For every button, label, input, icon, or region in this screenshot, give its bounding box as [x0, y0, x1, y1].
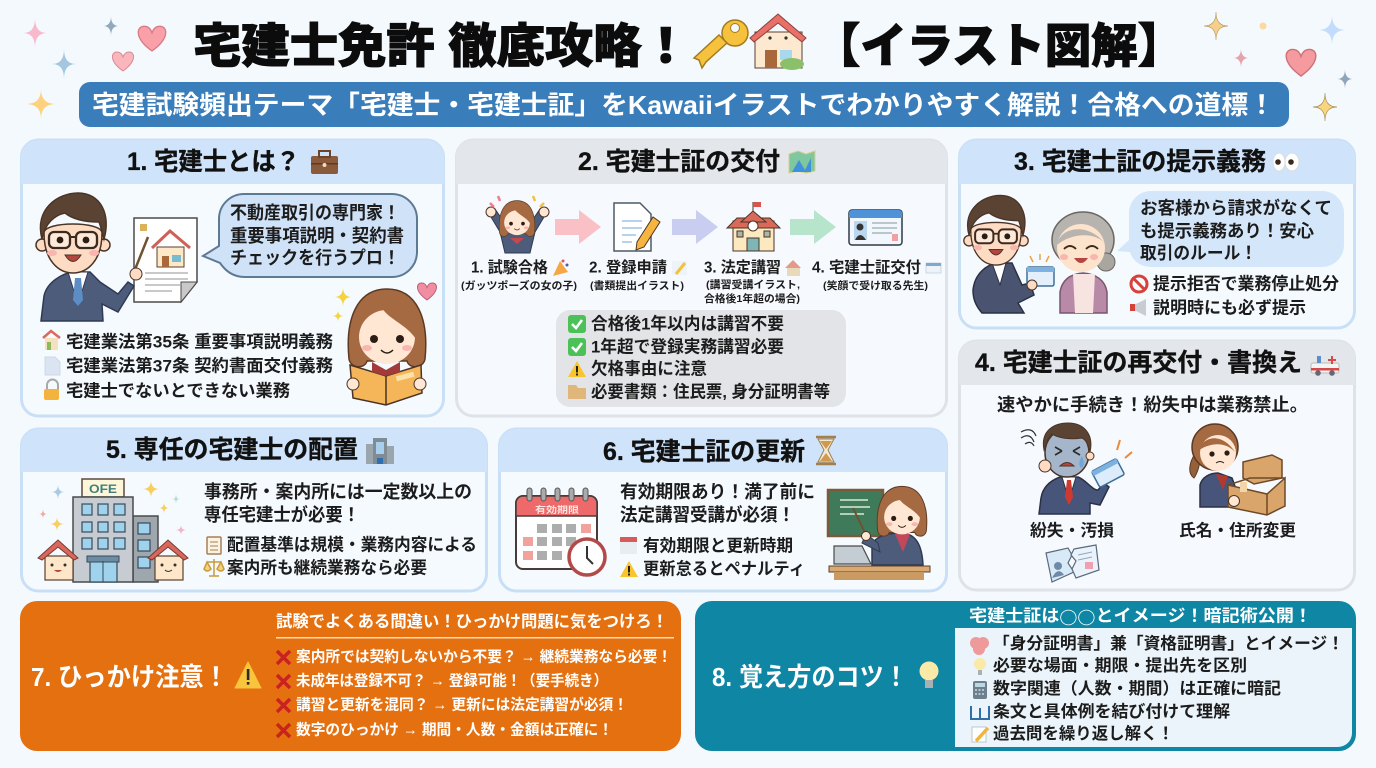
step labels: 1. 試験合格 — [471, 258, 548, 276]
panel: 8 覚え方のコツ — [695, 601, 1356, 751]
panel: 1 宅建士とは — [21, 140, 444, 416]
icon: small calendar — [620, 537, 637, 554]
panel: 5 専任の宅建士の配置 — [21, 429, 487, 591]
panel: 3 提示義務: 説明時にも必ず提示 — [1153, 298, 1306, 318]
body text: 事務所・案内所には一定数以上の — [204, 482, 472, 502]
icon: brain — [970, 637, 989, 655]
step: school — [727, 202, 780, 251]
icon: warning — [235, 662, 261, 688]
arrow: purple — [672, 210, 718, 244]
step: application form — [614, 203, 660, 251]
subtitle banner: 宅建試験頻出テーマ「宅建士・宅建士証」をKawaiiイラストでわかりやすく解説！合格への道標！ — [92, 90, 1275, 120]
step labels: 4. 宅建士証交付 — [812, 258, 921, 276]
speech bubble — [203, 194, 417, 277]
body text: 法定講習受講が必須！ — [620, 504, 795, 525]
heading: 8. 覚え方のコツ！ — [712, 662, 908, 692]
icon: small card — [926, 263, 941, 273]
list: 宅建士でないとできない業務 — [66, 382, 290, 400]
step labels: (ガッツポーズの女の子) — [461, 279, 577, 292]
icon: scales — [204, 559, 224, 576]
speech bubble: 不動産取引の専門家！ — [230, 203, 400, 223]
title: 宅建士免許 徹底攻略！ — [193, 20, 690, 72]
icon: office building — [366, 438, 394, 464]
speech bubble — [1117, 191, 1344, 267]
illustration: calendar with clock: 有効期限 — [535, 504, 579, 515]
trap list: 案内所では契約しないから不要？ → 継続業務なら必要！ — [296, 648, 672, 666]
icon: party popper — [553, 260, 568, 276]
illustration: office and houses — [38, 479, 188, 582]
icon: clipboard — [207, 537, 221, 554]
list: 宅建業法第37条 契約書面交付義務 — [66, 356, 333, 376]
step: license card — [849, 210, 902, 245]
icon: memo pencil — [972, 727, 988, 742]
trap list: 未成年は登録不可？ → 登録可能！（要手続き） — [296, 672, 608, 690]
panel: 6 宅建士証の更新 — [499, 429, 947, 591]
icon: light bulb — [920, 662, 938, 688]
body text: 配置基準は規模・業務内容による — [227, 534, 477, 554]
man presenting card — [964, 195, 1054, 313]
icon: memo — [672, 261, 687, 275]
tips list: 必要な場面・期限・提出先を区別 — [993, 656, 1247, 675]
heading: 2. 宅建士証の交付 — [578, 148, 780, 176]
body text: 専任宅建士が必要！ — [204, 504, 360, 525]
step labels: (書類提出イラスト) — [590, 279, 684, 292]
heading: 4. 宅建士証の再交付・書換え — [975, 349, 1302, 377]
heading: 1. 宅建士とは？ — [127, 148, 300, 176]
speech bubble: 取引のルール！ — [1140, 243, 1257, 263]
worried man — [1021, 423, 1132, 514]
speech bubble: 重要事項説明・契約書 — [230, 225, 404, 246]
broken license card — [1046, 545, 1099, 582]
icon: eyes — [1273, 153, 1299, 171]
woman with boxes — [1190, 424, 1285, 515]
icon: map — [789, 151, 815, 173]
icon: document — [45, 357, 60, 375]
man with pointer — [36, 193, 148, 321]
list: 宅建業法第35条 重要事項説明義務 — [66, 332, 333, 352]
tips box — [955, 628, 1352, 747]
tips list: 「身分証明書」兼「資格証明書」とイメージ！ — [993, 633, 1344, 653]
step labels — [461, 258, 941, 305]
tagline: 試験でよくある間違い！ひっかけ問題に気をつけろ！ — [276, 611, 668, 631]
tips list: 数字関連（人数・期間）は正確に暗記 — [993, 679, 1282, 698]
title: 【イラスト図解】 — [814, 20, 1184, 72]
arrow: pink — [555, 210, 601, 244]
icon: key — [694, 20, 748, 68]
trap list — [277, 648, 672, 738]
document with house — [134, 218, 197, 302]
checklist box: 必要書類：住民票, 身分証明書等 — [591, 382, 830, 402]
icon: house — [750, 14, 806, 70]
icon: calculator — [973, 681, 987, 699]
illustration: office and houses: OFE — [89, 482, 117, 496]
reading girl — [332, 283, 437, 405]
heading: 6. 宅建士証の更新 — [603, 438, 805, 466]
heading: 3. 宅建士証の提示義務 — [1014, 148, 1266, 176]
checklist box: 欠格事由に注意 — [591, 358, 707, 378]
tagline: 宅建士証は ○○とイメージ！暗記術公開！ — [969, 604, 1312, 628]
captions: 紛失・汚損 — [1030, 521, 1115, 540]
icon: folder — [568, 385, 586, 399]
arrow: green — [790, 210, 836, 244]
speech bubble: も提示義務あり！安心 — [1140, 221, 1314, 241]
icon: open book — [971, 706, 989, 719]
trap list: 講習と更新を混同？ → 更新には法定講習が必須！ — [296, 696, 628, 714]
step labels: (講習受講イラスト, — [706, 278, 800, 291]
panel: 4 再交付・書換え — [959, 341, 1355, 590]
checklist box — [556, 310, 846, 407]
decorative sparkles and hearts — [23, 12, 1353, 121]
trap list: 数字のひっかけ → 期間・人数・金額は正確に！ — [296, 720, 613, 738]
heading: 7. ひっかけ注意！ — [31, 662, 228, 692]
icon: house small — [43, 331, 60, 350]
body text — [620, 482, 815, 578]
tips list: 条文と具体例を結び付けて理解 — [993, 701, 1231, 721]
step: cheering girl — [486, 196, 549, 253]
body text: 案内所も継続業務なら必要 — [227, 558, 427, 578]
captions: 氏名・住所変更 — [1179, 521, 1297, 540]
step labels: (笑顔で受け取る先生) — [823, 279, 928, 292]
icon: megaphone — [1130, 299, 1146, 316]
checklist box: 合格後1年以内は講習不要 — [591, 314, 784, 334]
tips list: 過去問を繰り返し解く！ — [993, 724, 1174, 743]
icon: hourglass — [816, 437, 836, 464]
teacher at blackboard — [828, 486, 930, 580]
speech bubble: チェックを行うプロ！ — [230, 248, 400, 268]
elderly woman — [1052, 212, 1115, 313]
icon: prohibited — [1131, 276, 1147, 292]
icon: ambulance — [1311, 356, 1339, 376]
intro text: 速やかに手続き！紛失中は業務禁止。 — [997, 394, 1308, 415]
body text — [204, 482, 477, 578]
captions — [1030, 521, 1297, 540]
speech bubble: お客様から請求がなくて — [1140, 198, 1332, 218]
illustration: calendar with clock — [516, 488, 605, 575]
icon: briefcase — [311, 151, 338, 174]
checklist box: 1年超で登録実務講習必要 — [591, 336, 784, 356]
panel: 3 提示義務 — [959, 140, 1355, 328]
heading: 5. 専任の宅建士の配置 — [106, 436, 358, 464]
title — [193, 14, 1184, 72]
panel: 7 ひっかけ注意 — [20, 601, 681, 751]
subtitle banner — [79, 82, 1289, 127]
step labels: 合格後1年超の場合) — [704, 292, 800, 305]
body text: 有効期限あり！満了前に — [620, 482, 815, 502]
step labels: 3. 法定講習 — [704, 258, 781, 276]
icon: small bulb — [974, 658, 986, 675]
body text: 更新怠るとペナルティ — [643, 560, 805, 578]
icon: lock — [44, 380, 59, 400]
list — [43, 331, 333, 400]
tips list — [970, 633, 1344, 743]
panel: 2 宅建士証の交付 — [456, 140, 947, 416]
panel: 3 提示義務: 提示拒否で業務停止処分 — [1153, 274, 1339, 294]
icon: small school — [785, 260, 801, 276]
step labels: 2. 登録申請 — [589, 258, 667, 276]
body text: 有効期限と更新時期 — [643, 536, 793, 556]
